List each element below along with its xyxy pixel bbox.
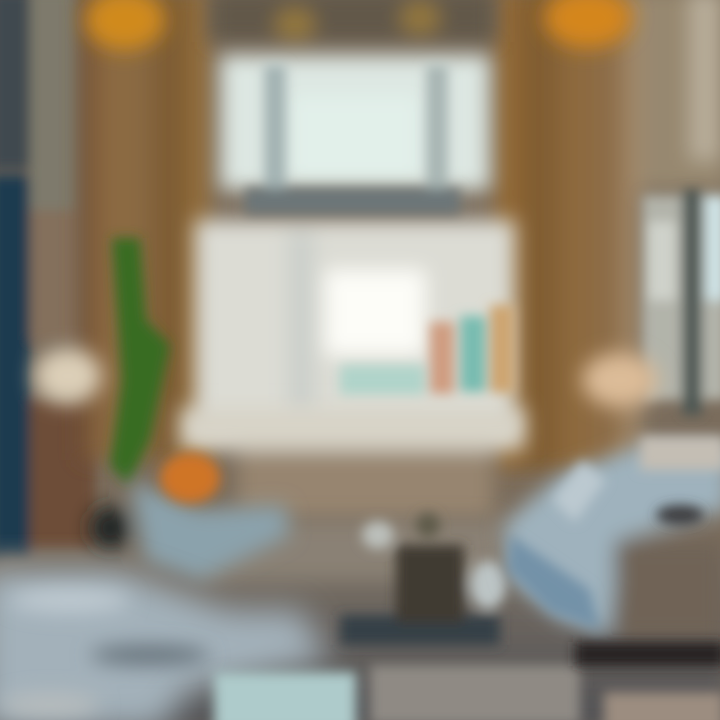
panel: back sofa <box>180 408 525 518</box>
icon: orange cushion <box>160 453 220 503</box>
panel: left curtain <box>80 0 210 460</box>
panel: left wall and column <box>0 0 95 560</box>
window frames <box>245 65 460 214</box>
icon: green plant <box>110 238 170 485</box>
panel: coffee table and lantern <box>340 513 506 645</box>
panel: central window <box>195 55 515 435</box>
panel: left armchair <box>90 480 290 580</box>
panel: floor reflection <box>214 665 720 720</box>
rug highlights <box>0 588 210 717</box>
sofa details <box>508 436 720 666</box>
panel: right curtain <box>495 0 720 470</box>
chart-like coloured buildings in window <box>340 305 514 395</box>
icon: right ceiling lamp glow <box>544 0 632 48</box>
panel: floor <box>0 520 720 720</box>
panel: right window <box>642 190 720 415</box>
icon: left ceiling lamp glow <box>85 0 165 50</box>
panel: top valance <box>210 0 495 42</box>
panel: right sofa <box>502 445 720 640</box>
icon: left table lamp <box>34 348 102 404</box>
icon: right table lamp <box>582 353 658 407</box>
panel: fluffy rug <box>0 570 330 720</box>
